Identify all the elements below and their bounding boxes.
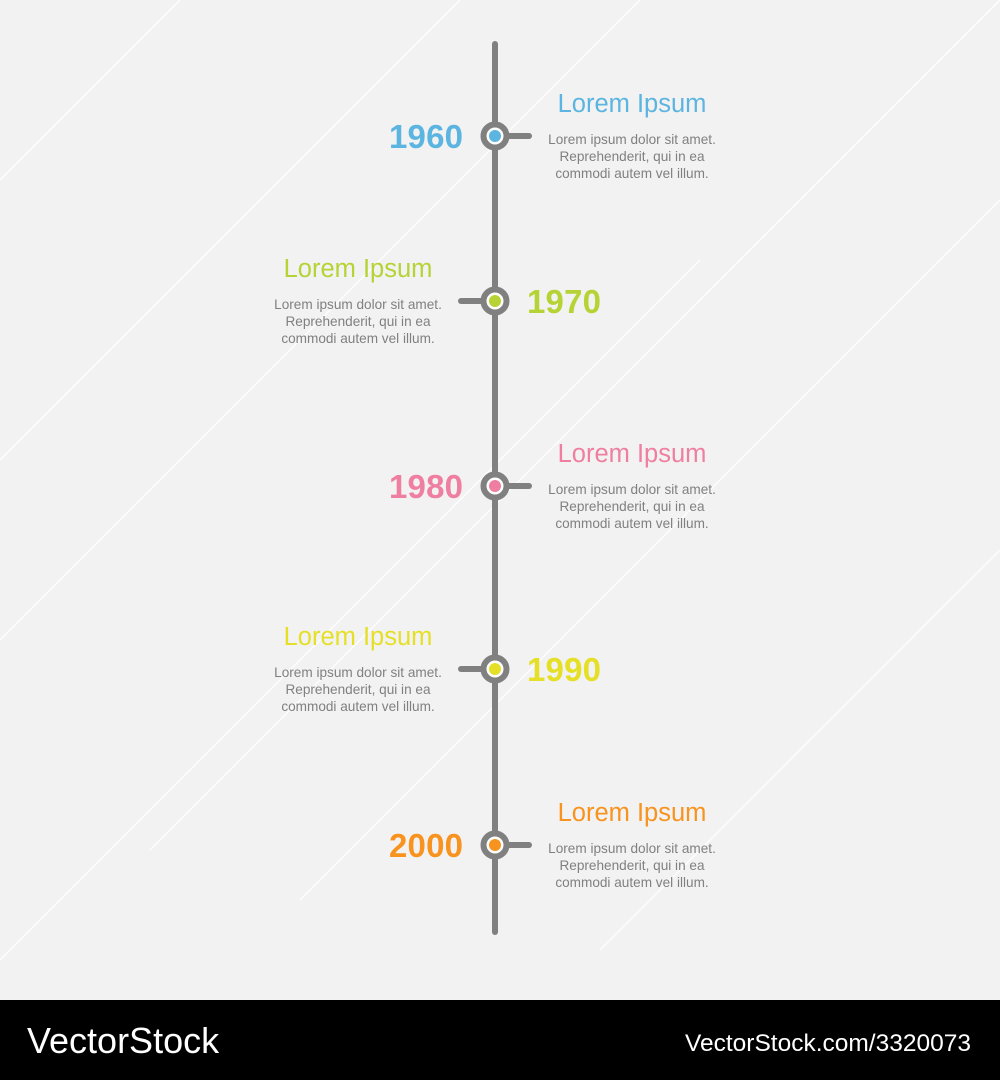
milestone 2000: Reprehenderit, qui in ea — [559, 858, 705, 873]
milestone 1980: Reprehenderit, qui in ea — [559, 499, 705, 514]
milestone 1990 — [274, 623, 601, 714]
milestone 1990: 1990 — [527, 651, 601, 688]
milestone 1970: Reprehenderit, qui in ea — [285, 314, 431, 329]
milestone 1970: Lorem Ipsum — [284, 255, 432, 283]
milestone 2000: Lorem ipsum dolor sit amet. — [548, 841, 716, 856]
milestone 1960: Lorem Ipsum — [558, 90, 706, 118]
milestone 1990: Lorem ipsum dolor sit amet. — [274, 665, 442, 680]
milestone 2000 — [389, 799, 716, 890]
milestone 1990: Lorem Ipsum — [284, 623, 432, 651]
milestone 1980: Lorem Ipsum — [558, 440, 706, 468]
milestone 1960: Reprehenderit, qui in ea — [559, 149, 705, 164]
milestone 1980: 1980 — [389, 468, 463, 505]
milestone 1970: commodi autem vel illum. — [281, 331, 435, 346]
milestone 2000: Lorem Ipsum — [558, 799, 706, 827]
milestone 1960: Lorem ipsum dolor sit amet. — [548, 132, 716, 147]
milestone 1960 — [389, 90, 716, 181]
footer bar: VectorStock.com/3320073 — [685, 1030, 971, 1057]
footer bar: VectorStock — [27, 1020, 220, 1061]
milestone 1990: Reprehenderit, qui in ea — [285, 682, 431, 697]
milestone 1980: commodi autem vel illum. — [555, 516, 709, 531]
milestone 2000: 2000 — [389, 827, 463, 864]
timeline axis — [492, 44, 498, 932]
milestone 1970 — [274, 255, 601, 346]
milestone 2000: commodi autem vel illum. — [555, 875, 709, 890]
milestone 1980: Lorem ipsum dolor sit amet. — [548, 482, 716, 497]
milestone 1980 — [389, 440, 716, 531]
milestone 1970: 1970 — [527, 283, 601, 320]
milestone 1960: 1960 — [389, 118, 463, 155]
footer bar — [0, 1000, 1000, 1080]
milestone 1960: commodi autem vel illum. — [555, 166, 709, 181]
milestone 1970: Lorem ipsum dolor sit amet. — [274, 297, 442, 312]
milestone 1990: commodi autem vel illum. — [281, 699, 435, 714]
